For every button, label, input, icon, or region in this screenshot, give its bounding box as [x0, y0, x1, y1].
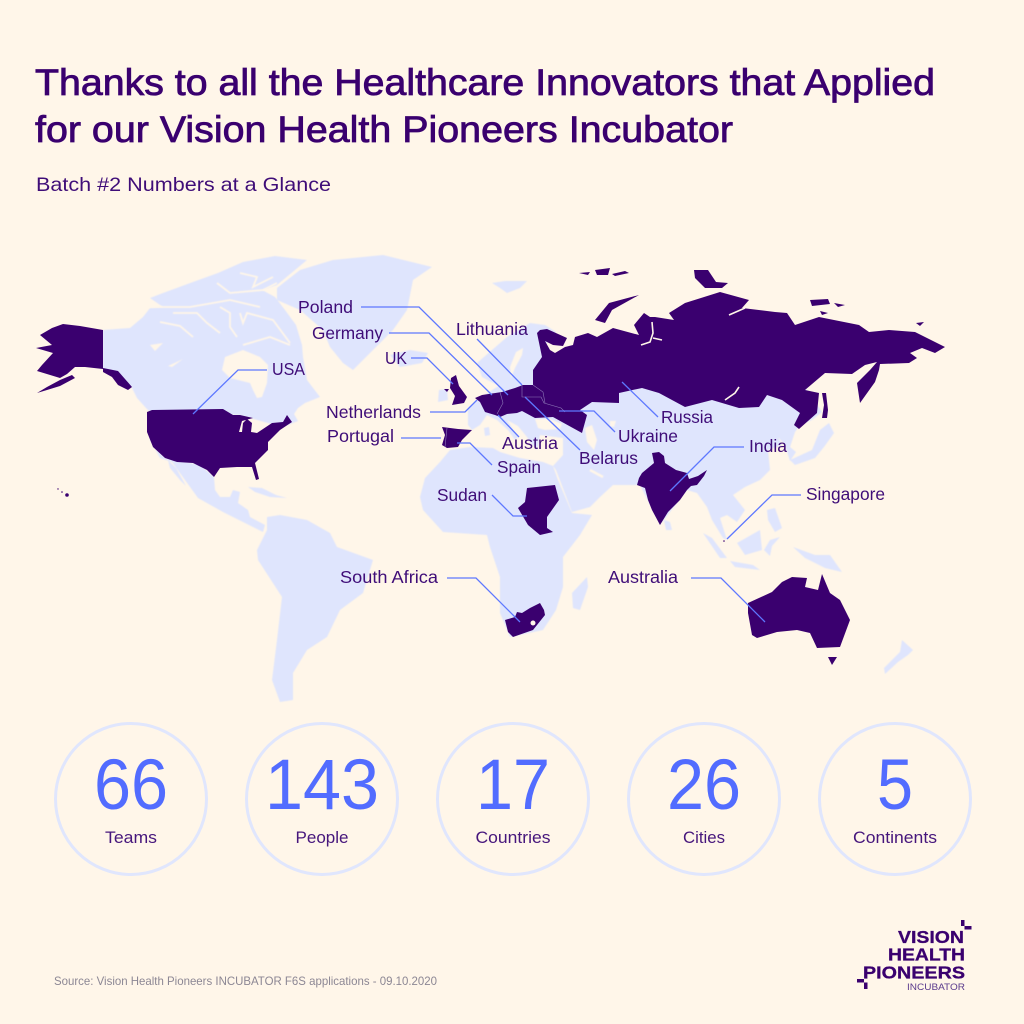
seas, lakes and arctic channels: [147, 273, 616, 477]
label: Austria: Austria: [502, 433, 558, 453]
land: selected countries: [36, 268, 945, 665]
label: Poland: Poland: [298, 297, 353, 317]
label: India: India: [749, 436, 787, 456]
label: Belarus: Belarus: [579, 448, 638, 468]
label: Netherlands: Netherlands: [326, 402, 421, 422]
country: Sudan: [518, 485, 559, 535]
country borders: [445, 385, 565, 447]
stat: Continents: Continents: [853, 828, 937, 847]
label: Lithuania: Lithuania: [456, 319, 528, 339]
logo: [857, 920, 972, 992]
stat: Teams: [56, 724, 206, 874]
label: Ukraine: Ukraine: [618, 426, 678, 446]
label: Netherlands: [326, 400, 477, 422]
logo: HEALTH: [888, 944, 965, 964]
label: India: [670, 436, 787, 491]
label: Spain: Spain: [497, 457, 541, 477]
label: Belarus: [525, 397, 638, 468]
Lesotho: [530, 620, 536, 626]
label: Poland: [298, 297, 508, 395]
stat: People: [246, 724, 398, 874]
country: Russia with eastern Europe: [475, 292, 945, 433]
label: USA: [193, 359, 305, 414]
title: Thanks to all the Healthcare Innovators that Applied: [35, 62, 935, 103]
land: unselected countries: [103, 255, 913, 702]
label: USA: USA: [272, 359, 305, 379]
logo marks: [857, 920, 972, 989]
country: Singapore: [723, 540, 725, 542]
label: Australia: Australia: [608, 567, 678, 587]
label: Portugal: [327, 426, 441, 446]
country: South Africa: [505, 603, 545, 637]
stat: Teams: 66: [94, 746, 168, 825]
stat: People: 143: [265, 746, 379, 825]
Hawaii: [57, 488, 69, 497]
stat: Cities: [628, 724, 780, 874]
label: Ukraine: [559, 411, 678, 446]
title: [35, 62, 935, 150]
label: Singapore: Singapore: [806, 484, 885, 504]
stat: Countries: [438, 724, 588, 874]
source note: Source: Vision Health Pioneers INCUBATOR F6S applications - 09.10.2020: [54, 974, 437, 988]
land cut-outs on selected countries: [641, 308, 745, 400]
logo: INCUBATOR: [907, 982, 966, 992]
label: Russia: Russia: [661, 407, 713, 427]
label: Portugal: Portugal: [327, 426, 394, 446]
label: Germany: Germany: [312, 323, 383, 343]
logo: VISION: [898, 927, 964, 947]
label: Austria: [498, 415, 558, 453]
world map: [36, 255, 945, 702]
callouts: leader lines and country labels: [193, 297, 885, 622]
label: Russia: [622, 382, 713, 427]
country: Alaska: [36, 324, 103, 378]
stat: Continents: 5: [877, 746, 913, 825]
label: Germany: [312, 323, 492, 395]
country: USA: [147, 409, 292, 480]
country: Australia: [748, 574, 850, 648]
stat: Cities: Cities: [683, 828, 725, 847]
label: South Africa: [340, 567, 520, 622]
label: Sudan: [437, 485, 527, 516]
stat: Cities: 26: [667, 746, 741, 825]
stat: Continents: [820, 724, 970, 874]
stats row: [56, 724, 970, 874]
logo: PIONEERS: [863, 962, 965, 982]
country: India: [637, 452, 707, 525]
label: South Africa: South Africa: [340, 567, 438, 587]
country: Spain and Portugal: [442, 427, 472, 448]
label: Australia: [608, 567, 765, 622]
label: UK: [385, 348, 453, 384]
subtitle: Batch #2 Numbers at a Glance: [36, 174, 331, 196]
label: Spain: [457, 443, 541, 477]
title: for our Vision Health Pioneers Incubator: [35, 109, 733, 150]
label: Sudan: Sudan: [437, 485, 487, 505]
stat: Countries: Countries: [476, 828, 550, 847]
country: UK: [450, 375, 467, 405]
stat: People: People: [296, 828, 348, 847]
label: Singapore: [727, 484, 885, 539]
stat: Teams: Teams: [105, 828, 157, 847]
label: Lithuania: [456, 319, 528, 385]
stat: Countries: 17: [476, 746, 550, 825]
label: UK: UK: [385, 348, 407, 368]
